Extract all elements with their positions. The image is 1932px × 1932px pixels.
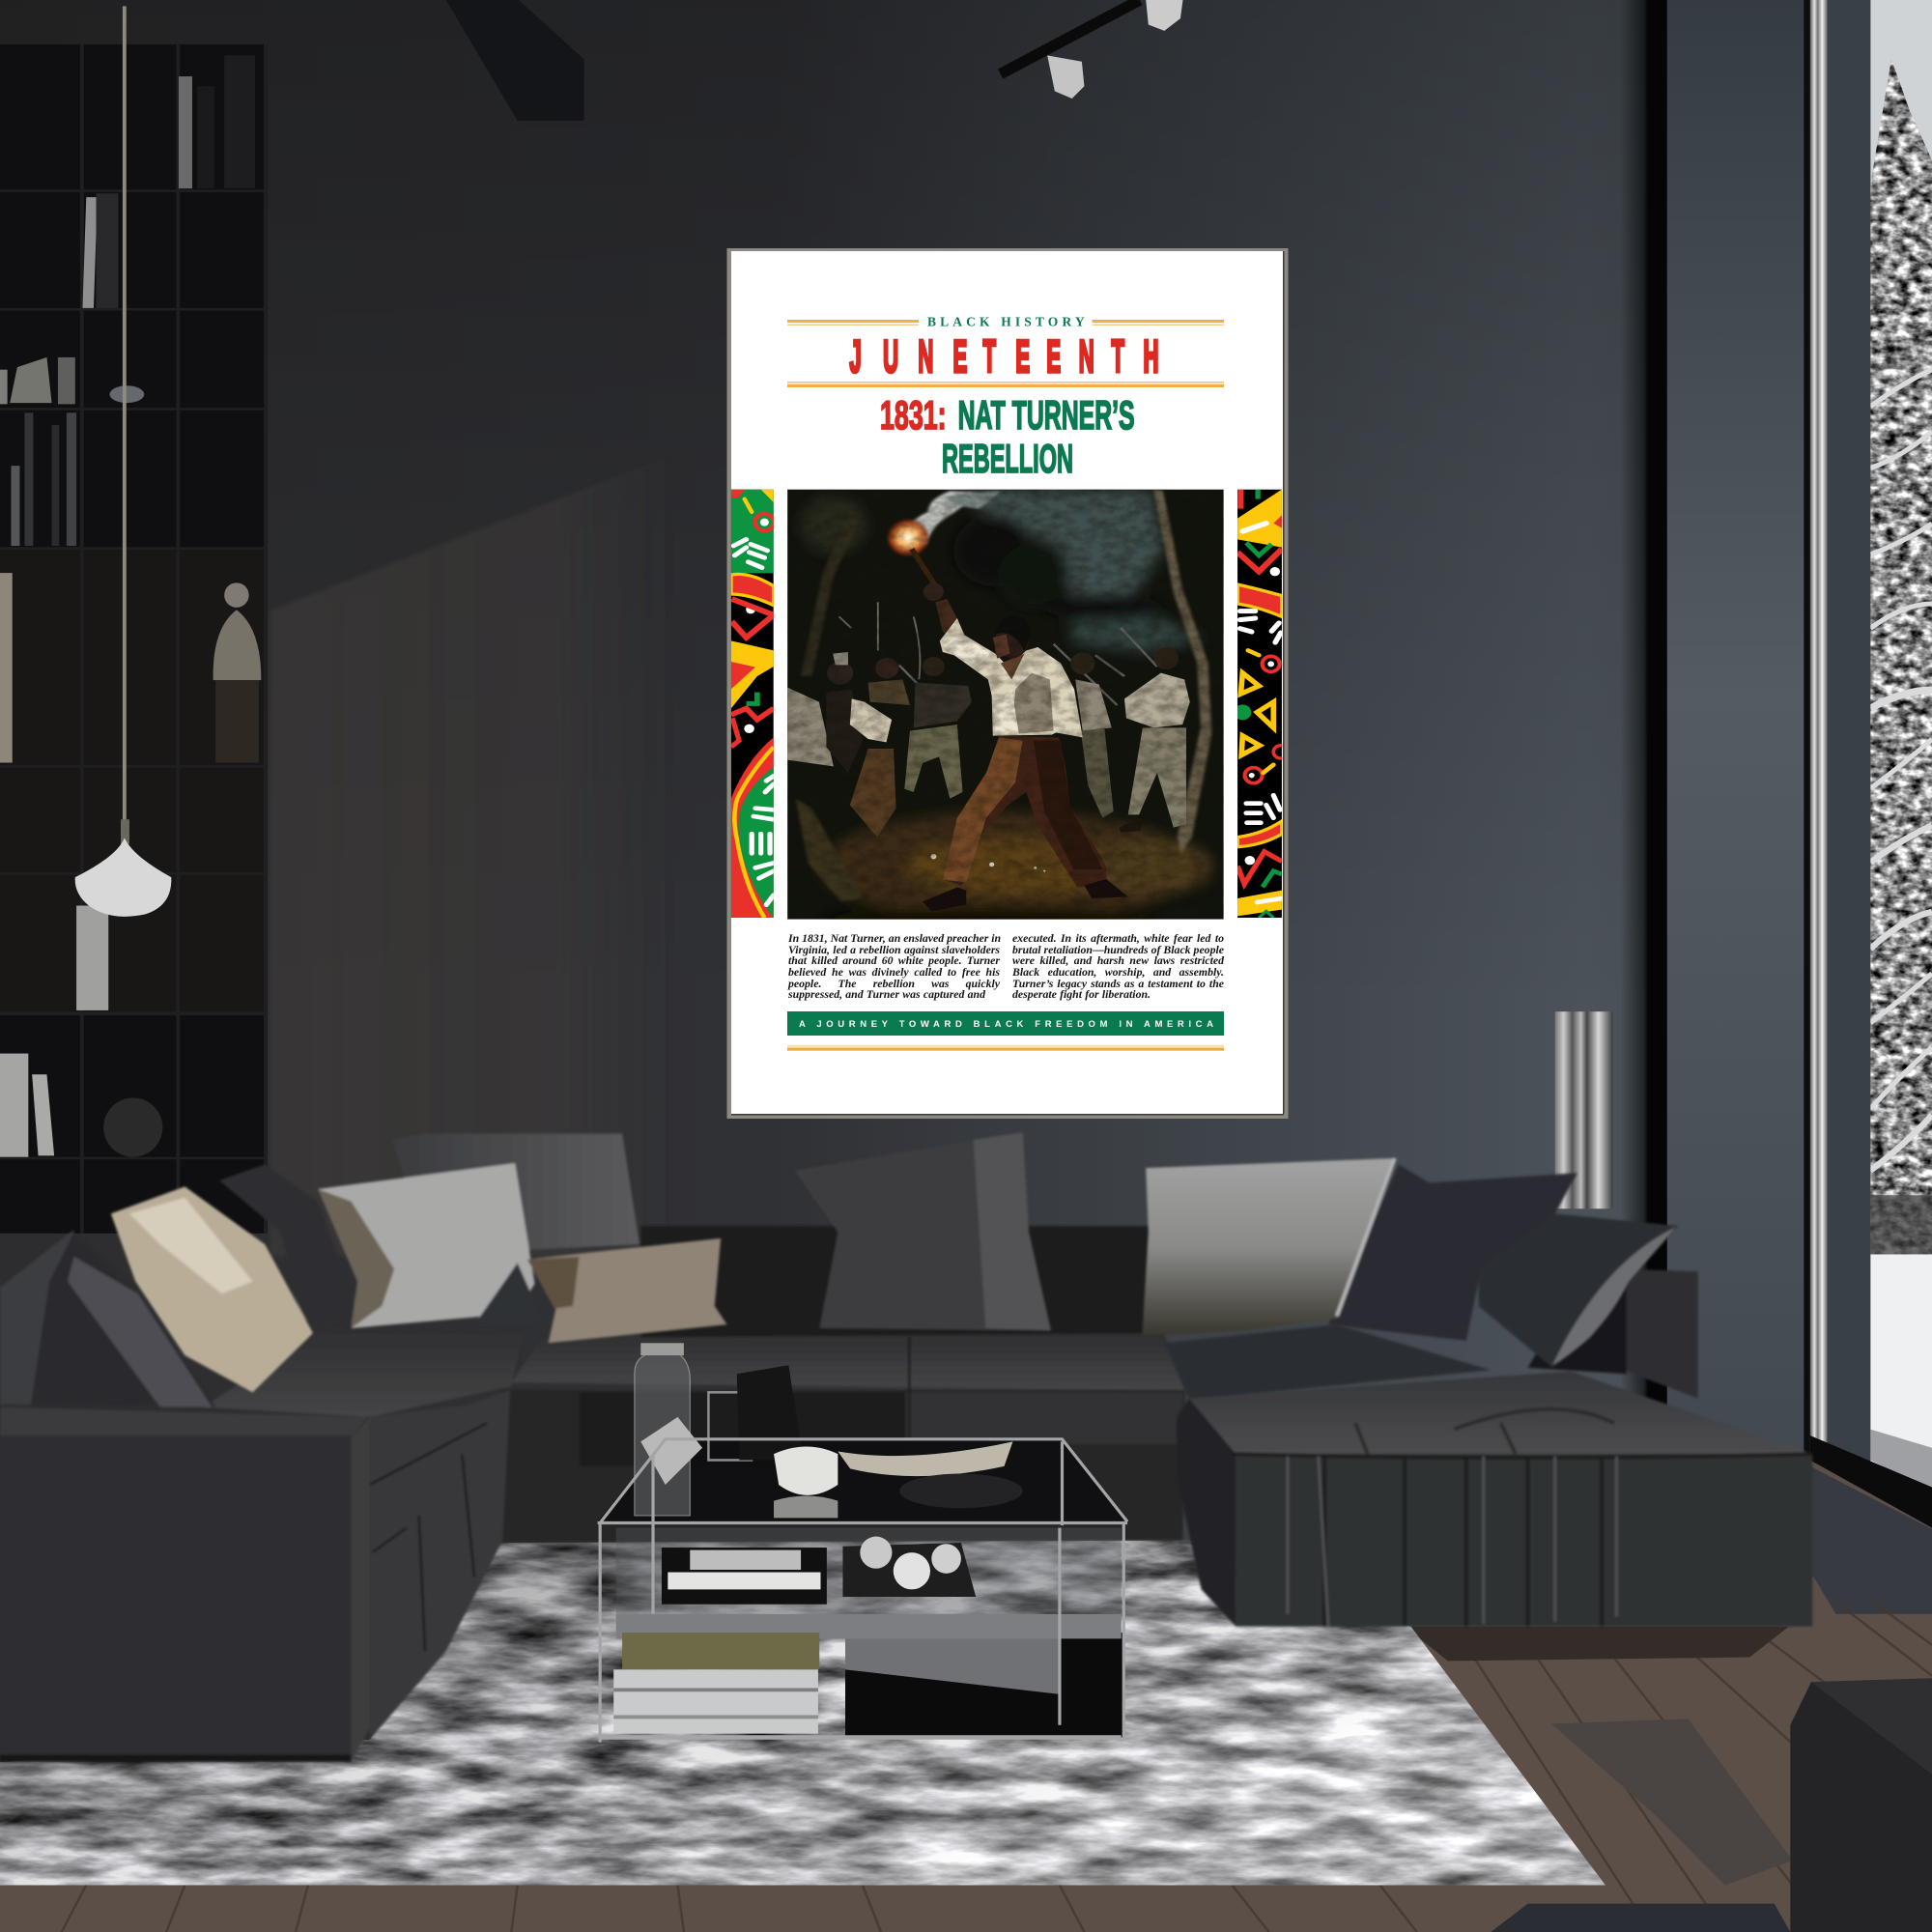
body text columns [773,927,1236,1005]
body text columns: Virginia, led a rebellion against slaveholders [788,943,1000,956]
body text columns: desperate fight for liberation. [1012,987,1151,1001]
table objects [613,1343,1023,1734]
poster masthead: JUNETEENTH [849,331,1158,382]
poster title: 1831: [880,392,947,438]
poster title [880,392,1135,481]
body text columns: were killed, and harsh new laws restricted [1012,953,1224,967]
body text columns: executed. In its aftermath, white fear led to [1012,931,1224,945]
shaggy rug [0,1540,1605,1886]
track lights [1001,0,1182,99]
poster title: REBELLION [942,436,1073,481]
body text columns: brutal retaliation—hundreds of Black people [1012,943,1224,956]
torch and raised arm [912,549,935,584]
right wall panels and chrome mullion [1620,0,1932,1552]
foreground armchair [1790,1678,1932,1932]
body text columns: that killed around 60 white people. Turner [788,953,1000,967]
body text columns: Turner’s legacy stands as a testament to the [1012,977,1224,990]
chrome vase [1555,1011,1613,1208]
right pattern strip [1237,489,1282,918]
pillows [0,1132,1678,1407]
sofa: centre section [496,1226,1185,1543]
window with snowy tree [1870,0,1932,1528]
trousers [943,736,1106,887]
shirt [940,618,1083,737]
poster frame [726,248,1289,1119]
body text columns: believed he was divinely called to free his [788,965,1000,979]
footer banner [787,1011,1224,1051]
body text columns: suppressed, and Turner was captured and [788,987,985,1001]
footer banner: A JOURNEY TOWARD BLACK FREEDOM IN AMERICA [799,1019,1213,1030]
pendant lamp [75,6,171,917]
wood floor [0,1441,1932,1932]
sofa: left section [0,1328,524,1762]
body text columns: Black education, worship, and assembly. [1012,965,1224,979]
poster masthead [787,314,1224,387]
crowd right [1070,652,1095,674]
sofa: right chaise [1164,1269,1812,1627]
left pattern strip [731,490,774,918]
body text columns: people. The rebellion was quickly [788,977,1000,990]
ceiling beam [446,0,584,121]
glass coffee table [598,1343,1127,1743]
bookshelf [0,44,268,1234]
painting: Nat Turner raising a torch [787,490,1224,927]
crowd left [787,688,834,766]
poster masthead: BLACK HISTORY [927,314,1085,328]
body text columns: In 1831, Nat Turner, an enslaved preacher in [788,931,1001,945]
poster title: NAT TURNER’S [958,392,1135,438]
